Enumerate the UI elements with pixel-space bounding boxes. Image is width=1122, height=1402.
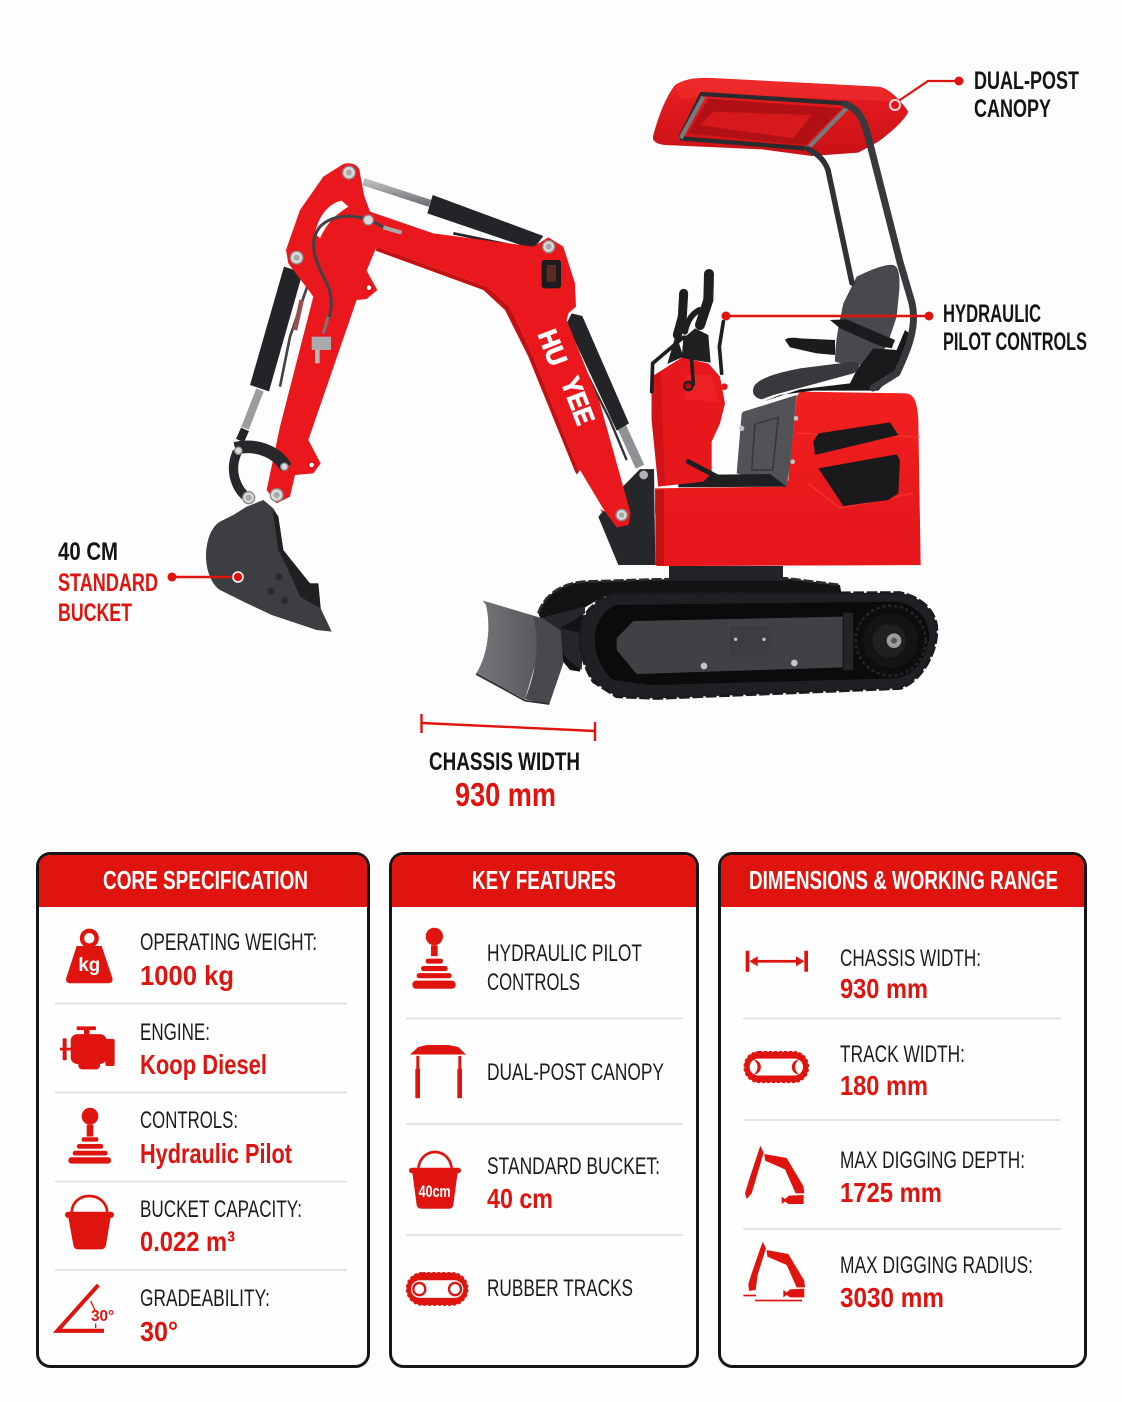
callout: standard bucket bbox=[58, 538, 243, 627]
header: core specification: CORE SPECIFICATION bbox=[103, 865, 308, 895]
canopy posts bbox=[808, 104, 914, 388]
row: rubber tracks: RUBBER TRACKS bbox=[487, 1275, 633, 1302]
panel: core specification bbox=[38, 854, 368, 1366]
row: operating weight: 1000 kg bbox=[140, 960, 234, 991]
callout: dual-post canopy: CANOPY bbox=[974, 95, 1051, 123]
red body housing bbox=[655, 392, 921, 566]
icons: key features bbox=[407, 928, 468, 1305]
callout: standard bucket: STANDARD bbox=[58, 569, 158, 597]
red boom and arm bbox=[267, 163, 631, 527]
row: gradeability bbox=[140, 1285, 270, 1347]
row: dual-post canopy: DUAL-POST CANOPY bbox=[487, 1059, 664, 1086]
bucket cylinder bbox=[240, 267, 308, 441]
row: hydraulic pilot controls bbox=[487, 940, 642, 996]
callout: standard bucket: 40 CM bbox=[58, 538, 118, 566]
row: track width: 180 mm bbox=[840, 1070, 928, 1101]
icon: slope: 30° bbox=[91, 1308, 114, 1325]
row: max digging radius bbox=[840, 1252, 1033, 1313]
row: controls bbox=[140, 1107, 292, 1169]
icon: digging depth bbox=[745, 1146, 804, 1204]
header: key features bbox=[392, 855, 696, 907]
row: operating weight bbox=[140, 929, 317, 991]
icon: rubber track bbox=[407, 1273, 468, 1305]
row: bucket capacity: BUCKET CAPACITY: bbox=[140, 1196, 302, 1223]
row: max digging depth: 1725 mm bbox=[840, 1177, 942, 1208]
track side plate bbox=[617, 617, 843, 674]
panel: dimensions and working range bbox=[720, 854, 1086, 1366]
slew ring bbox=[669, 566, 783, 581]
row: hydraulic pilot controls: HYDRAULIC PILOT bbox=[487, 940, 642, 967]
row: max digging radius: 3030 mm bbox=[840, 1282, 944, 1313]
brand lettering: YEE bbox=[555, 373, 601, 429]
icon: canopy bbox=[410, 1045, 466, 1098]
seat frame bbox=[763, 330, 912, 402]
icon: 40cm bucket bbox=[409, 1152, 461, 1209]
header: dimensions and working range bbox=[721, 855, 1084, 907]
icon: joystick bbox=[68, 1108, 111, 1164]
canopy roof bbox=[653, 78, 908, 156]
row: max digging depth: MAX DIGGING DEPTH: bbox=[840, 1147, 1025, 1174]
excavator boom, arm and bucket bbox=[206, 163, 648, 632]
header: core specification bbox=[39, 855, 367, 907]
panel: key features bbox=[390, 854, 698, 1366]
icon: weight bbox=[66, 931, 113, 983]
dozer blade bbox=[476, 601, 563, 704]
hydraulic hose and valve bbox=[312, 216, 402, 363]
engine vents bbox=[813, 422, 900, 506]
callout: chassis width dimension: CHASSIS WIDTH bbox=[429, 748, 580, 776]
callout: standard bucket: BUCKET bbox=[58, 599, 132, 627]
icons: digging arms bbox=[743, 1146, 805, 1301]
canopy frame bbox=[680, 94, 847, 149]
row: track width: TRACK WIDTH: bbox=[840, 1041, 965, 1068]
icon: engine bbox=[60, 1026, 115, 1069]
row: gradeability: 30° bbox=[140, 1316, 178, 1347]
icon: joystick bbox=[412, 928, 456, 989]
excavator illustration bbox=[206, 78, 937, 704]
row: chassis width: CHASSIS WIDTH: bbox=[840, 945, 981, 972]
row: controls: CONTROLS: bbox=[140, 1107, 238, 1134]
row: bucket capacity bbox=[140, 1196, 302, 1257]
undercarriage: tracks and dozer blade bbox=[476, 566, 937, 704]
callout: hydraulic pilot controls: HYDRAULIC bbox=[943, 300, 1041, 328]
row: gradeability: GRADEABILITY: bbox=[140, 1285, 270, 1312]
brand lettering: HU bbox=[532, 325, 573, 370]
icon: width arrow bbox=[746, 951, 808, 972]
callout: chassis width dimension: 930 mm bbox=[455, 776, 556, 813]
blade arm bbox=[538, 607, 585, 670]
row: track width bbox=[840, 1041, 965, 1101]
rear track bbox=[538, 578, 842, 672]
control boots bbox=[667, 328, 711, 364]
armrests bbox=[785, 319, 895, 355]
icon: bucket bbox=[65, 1196, 114, 1249]
main track bbox=[580, 593, 937, 698]
grey service door bbox=[737, 395, 798, 486]
seat cushion bbox=[753, 362, 859, 399]
row: engine: Koop Diesel bbox=[140, 1049, 267, 1080]
callout: dual-post canopy bbox=[890, 67, 1079, 123]
boom foot bracket bbox=[598, 469, 655, 565]
boom shading bbox=[376, 247, 605, 512]
row: controls: Hydraulic Pilot bbox=[140, 1138, 292, 1169]
row: standard bucket bbox=[487, 1153, 660, 1214]
row: chassis width bbox=[840, 945, 981, 1004]
row: engine: ENGINE: bbox=[140, 1019, 210, 1046]
bucket linkage bbox=[234, 447, 286, 498]
console knobs bbox=[683, 381, 728, 391]
icon: weight: kg bbox=[78, 954, 100, 975]
row: max digging radius: MAX DIGGING RADIUS: bbox=[840, 1252, 1033, 1279]
callout: chassis width dimension bbox=[422, 714, 595, 813]
bucket bbox=[206, 500, 332, 632]
drive sprocket bbox=[856, 606, 926, 676]
icons: width and track bbox=[744, 951, 808, 1082]
row: hydraulic pilot controls: CONTROLS bbox=[487, 969, 580, 996]
row: engine bbox=[140, 1019, 267, 1080]
row: standard bucket: STANDARD BUCKET: bbox=[487, 1153, 660, 1180]
row: chassis width: 930 mm bbox=[840, 973, 928, 1004]
row: standard bucket: 40 cm bbox=[487, 1183, 553, 1214]
brand lettering bbox=[532, 325, 601, 429]
callout: dual-post canopy: DUAL-POST bbox=[974, 67, 1079, 95]
cab floor bbox=[678, 474, 787, 487]
upper body, seat and controls bbox=[652, 265, 921, 566]
callout: hydraulic pilot controls bbox=[722, 300, 1087, 356]
canopy window bbox=[688, 98, 842, 145]
icons: core specification bbox=[57, 931, 115, 1331]
icon: 40cm bucket: 40cm bbox=[419, 1182, 451, 1201]
body shading bbox=[655, 488, 921, 566]
row: bucket capacity: 0.022 m³ bbox=[140, 1226, 235, 1257]
control levers bbox=[652, 274, 723, 478]
work lamp bbox=[542, 260, 561, 288]
header: key features: KEY FEATURES bbox=[472, 865, 616, 895]
icon: digging radius bbox=[743, 1242, 805, 1301]
boom cylinder bbox=[567, 313, 640, 467]
icon: slope bbox=[57, 1285, 114, 1331]
seat back bbox=[835, 265, 899, 367]
row: max digging depth bbox=[840, 1147, 1025, 1208]
icon: track width bbox=[744, 1052, 808, 1082]
row: operating weight: OPERATING WEIGHT: bbox=[140, 929, 317, 956]
control console bbox=[652, 358, 725, 487]
pivot pins bbox=[235, 166, 648, 521]
boom top cylinder bbox=[363, 182, 543, 249]
